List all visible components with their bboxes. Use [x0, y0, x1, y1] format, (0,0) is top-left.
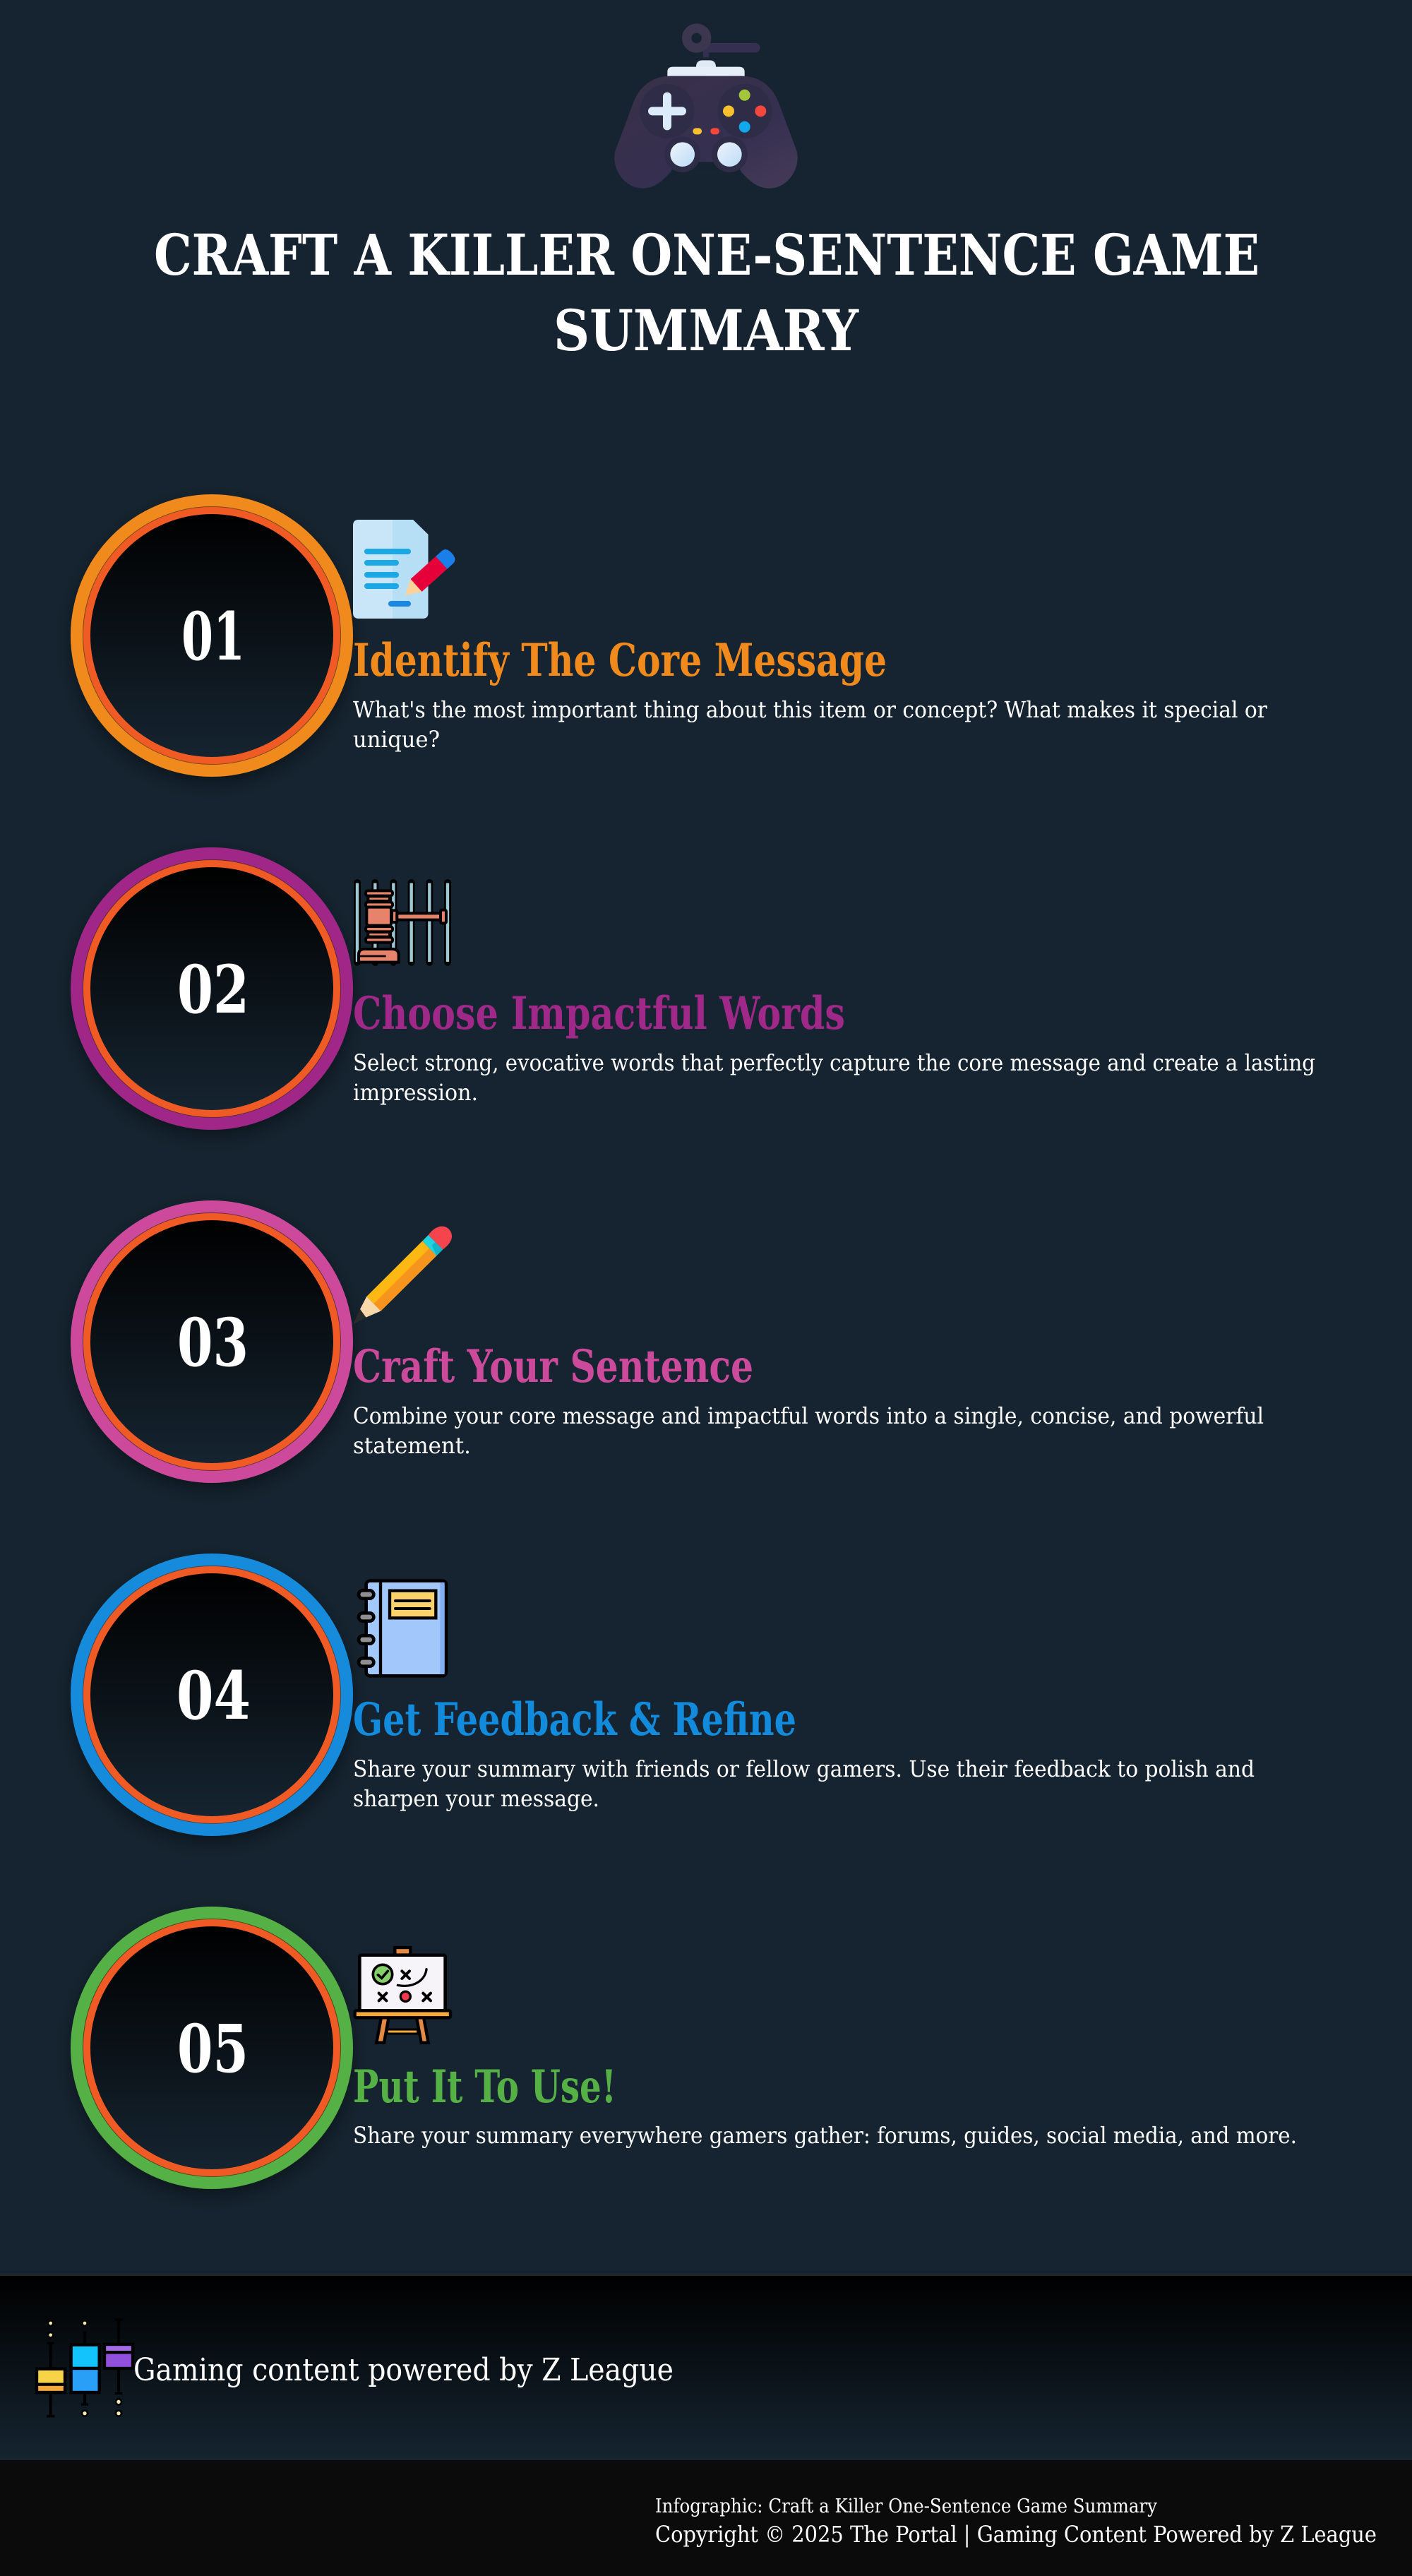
- icon: strategy board: [355, 1948, 450, 2043]
- footer caption: Infographic: Craft a Killer One-Sentence Game Summary: [655, 2496, 1158, 2517]
- number badge 02: 02: [177, 951, 249, 1029]
- heading: Put It To Use!: [353, 2061, 616, 2113]
- description: Select strong, evocative words that perfectly capture the core message and create a lasting: [353, 1049, 1315, 1076]
- heading: Identify The Core Message: [353, 634, 887, 687]
- description: Combine your core message and impactful words into a single, concise, and powerful: [353, 1402, 1264, 1429]
- description: statement.: [353, 1432, 471, 1459]
- description: [353, 1755, 1255, 1812]
- panel: step 1: [71, 494, 1268, 777]
- panel: step 4: [71, 1554, 1255, 1836]
- icon: notebook: [359, 1581, 446, 1676]
- title: SUMMARY: [554, 297, 859, 364]
- description: [353, 1049, 1315, 1106]
- description: unique?: [353, 726, 440, 753]
- number badge 03: [71, 1200, 353, 1483]
- banner text: Gaming content powered by Z League: [133, 2352, 674, 2388]
- heading: Choose Impactful Words: [353, 987, 845, 1040]
- heading: Craft Your Sentence: [353, 1340, 753, 1393]
- icon: gavel and bars: [357, 883, 448, 962]
- number badge 04: [71, 1554, 353, 1836]
- panel: step 5: [71, 1907, 1297, 2189]
- number badge 05: 05: [177, 2010, 249, 2088]
- heading: Get Feedback & Refine: [353, 1693, 796, 1746]
- icon: candlestick bars: [37, 2320, 133, 2416]
- icon: document and pencil: [353, 520, 457, 619]
- footer: [0, 2460, 1412, 2576]
- description: sharpen your message.: [353, 1785, 599, 1812]
- number badge 04: 04: [176, 1657, 251, 1735]
- panel: step 2: [71, 847, 1315, 1130]
- title: [154, 222, 1260, 364]
- description: [353, 1402, 1264, 1459]
- icon: game controller: [614, 28, 798, 189]
- description: Share your summary with friends or fellow gamers. Use their feedback to polish and: [353, 1755, 1255, 1782]
- description: impression.: [353, 1079, 478, 1106]
- number badge 01: 01: [181, 598, 245, 676]
- number badge 03: 03: [177, 1304, 249, 1382]
- number badge 01: [71, 494, 353, 777]
- panel: step 3: [71, 1200, 1264, 1483]
- number badge 05: [71, 1907, 353, 2189]
- description: Share your summary everywhere gamers gather: forums, guides, social media, and more.: [353, 2122, 1297, 2149]
- icon: pencil: [353, 1227, 452, 1325]
- description: [353, 696, 1268, 753]
- number badge 02: [71, 847, 353, 1130]
- banner: Z League: [0, 2274, 1412, 2460]
- description: What's the most important thing about this item or concept? What makes it special or: [353, 696, 1268, 723]
